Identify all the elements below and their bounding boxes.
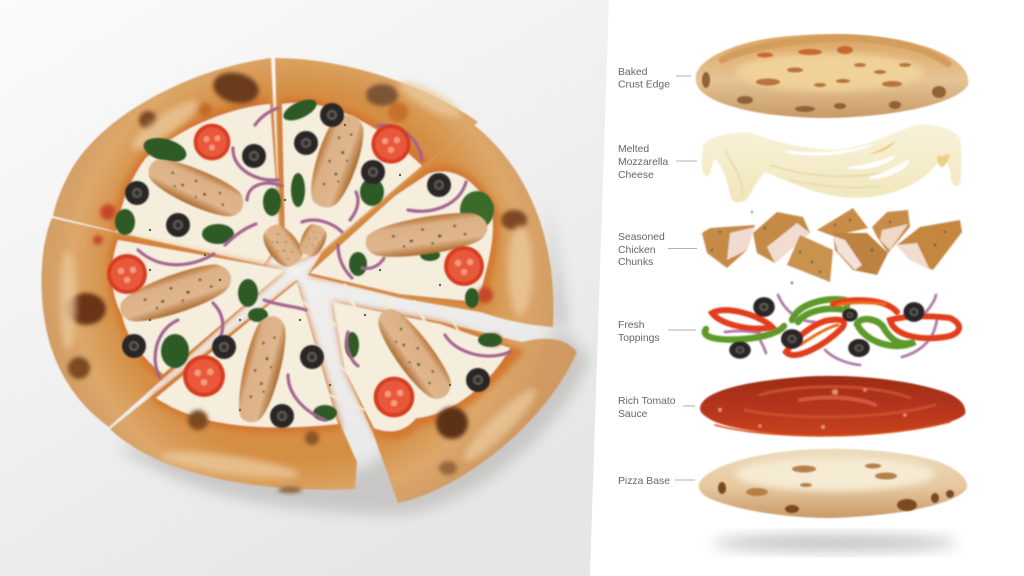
layer: rich tomato sauce <box>700 376 965 436</box>
herb flecks <box>149 124 451 411</box>
onion slices <box>725 295 937 365</box>
label: pizza base <box>618 476 695 487</box>
sauce swirls <box>715 387 950 436</box>
yellow folds <box>868 141 895 155</box>
slice: top left <box>53 58 280 268</box>
whole pizza photo <box>42 58 577 503</box>
chunk 1 <box>702 225 755 268</box>
label: seasoned chicken chunks: Chunks <box>618 257 653 268</box>
tomato slices <box>107 124 484 417</box>
label: seasoned chicken chunks: Chicken <box>618 245 656 256</box>
layer: baked crust edge <box>696 34 968 118</box>
dough body <box>699 449 967 518</box>
chunk 5 <box>833 233 888 275</box>
cheese sheet with drips <box>702 124 962 203</box>
label: fresh toppings: Toppings <box>618 333 660 344</box>
olive rings <box>729 297 925 359</box>
floating shadow under base <box>713 534 957 552</box>
chunk 6 <box>872 210 910 253</box>
label: rich tomato sauce <box>618 396 695 420</box>
cheese shading <box>725 150 900 198</box>
chicken strips <box>115 109 490 427</box>
slice: left <box>42 218 285 427</box>
cheese strings between slices <box>300 285 458 410</box>
label: fresh toppings: Fresh <box>618 320 645 331</box>
olives <box>122 103 490 428</box>
slice: top <box>275 58 478 262</box>
label: baked crust edge: Baked <box>618 67 648 78</box>
pizza drop shadow <box>115 200 590 515</box>
cheese top <box>736 53 924 91</box>
label: melted mozzarella cheese <box>618 144 697 181</box>
label: baked crust edge <box>618 67 691 90</box>
layer: fresh toppings <box>705 295 959 365</box>
chunk 7 <box>897 220 962 270</box>
layer: pizza base <box>699 449 967 518</box>
chunk 2 <box>753 212 810 263</box>
red peppers <box>712 300 959 355</box>
rim and browned spots <box>702 38 948 112</box>
label: seasoned chicken chunks: Seasoned <box>618 232 665 243</box>
char and sauce on crust <box>66 69 527 493</box>
layer: seasoned chicken chunks <box>702 208 962 284</box>
label: melted mozzarella cheese: Mozzarella <box>618 157 668 168</box>
label: seasoned chicken chunks <box>618 232 697 268</box>
lighter crust highlights <box>60 76 542 484</box>
gaps in cheese <box>785 145 908 178</box>
green peppers <box>705 299 915 346</box>
label: rich tomato sauce: Rich Tomato <box>618 396 676 407</box>
red onion arcs <box>138 108 510 420</box>
crust body <box>696 34 968 118</box>
spinach leaves <box>115 95 502 421</box>
label: melted mozzarella cheese: Melted <box>618 144 649 155</box>
chunk back <box>817 208 868 236</box>
slice: bottom left <box>110 280 357 490</box>
pale dough top <box>735 457 935 491</box>
browned spots <box>718 464 954 513</box>
left photo background <box>0 0 609 576</box>
slice: bottom right <box>333 302 577 503</box>
layer: melted mozzarella <box>702 124 962 203</box>
right panel <box>590 0 1024 576</box>
sauce pool <box>700 376 965 436</box>
chunk 3 <box>787 235 833 282</box>
label: melted mozzarella cheese: Cheese <box>618 170 654 181</box>
label: pizza base: Pizza Base <box>618 476 670 487</box>
label: baked crust edge: Crust Edge <box>618 80 670 90</box>
label: fresh toppings <box>618 320 696 344</box>
herb specks <box>711 211 946 284</box>
label: rich tomato sauce: Sauce <box>618 409 648 420</box>
slice: right <box>308 124 553 327</box>
